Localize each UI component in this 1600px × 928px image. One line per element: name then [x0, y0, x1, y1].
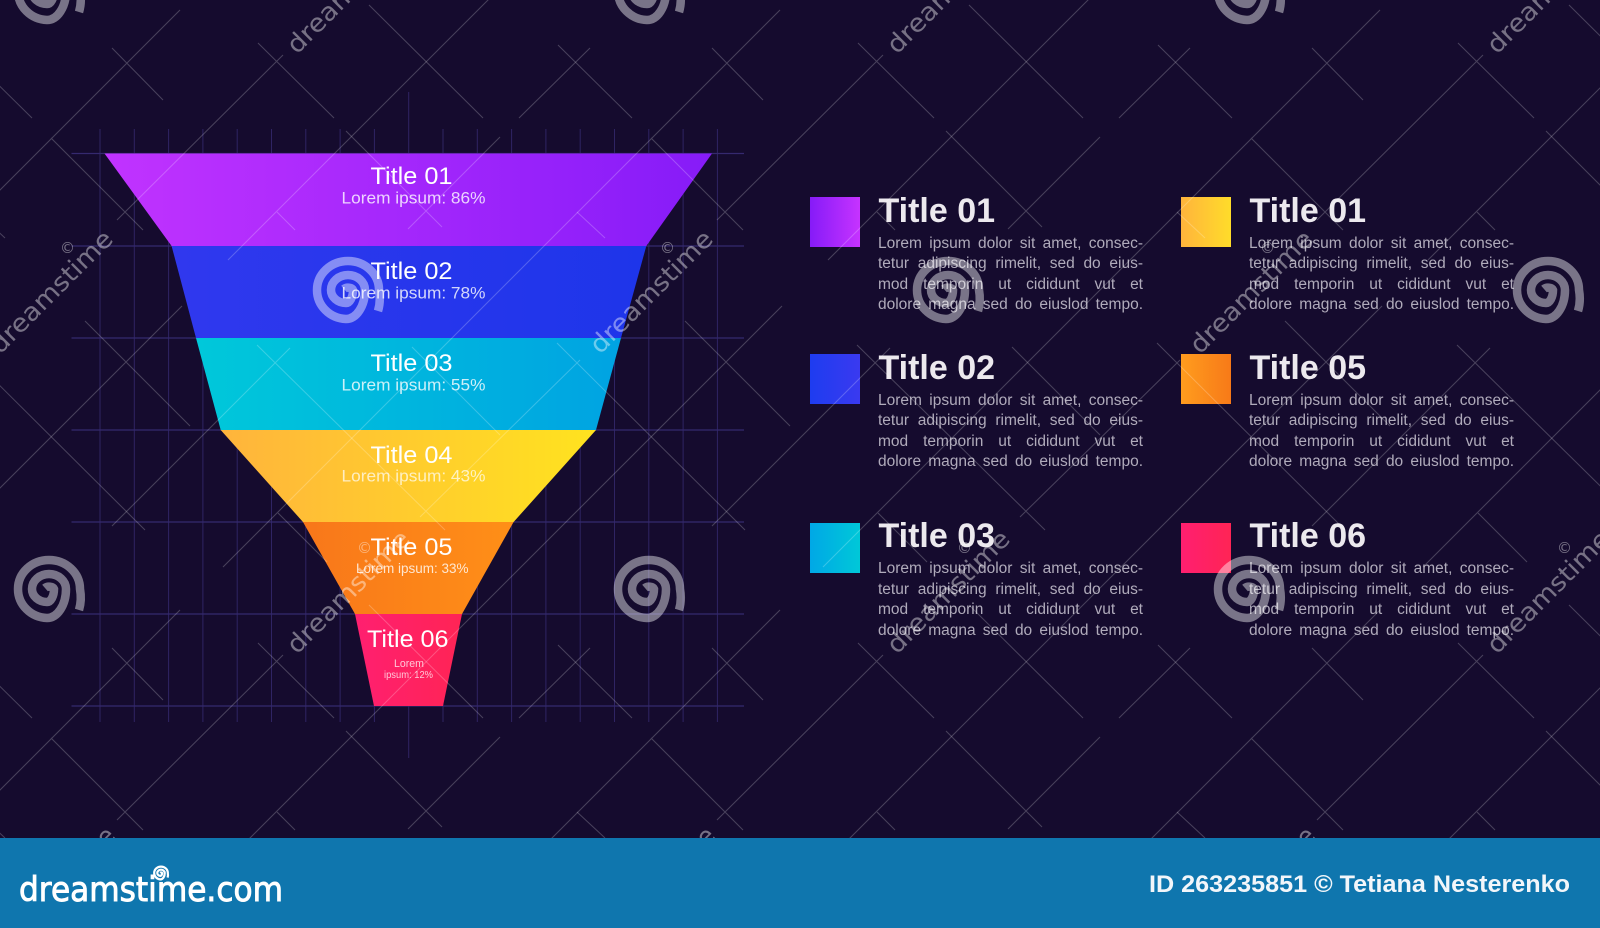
body text: mod temporin ut cididunt vut et — [1249, 433, 1514, 450]
funnel label 6 — [367, 626, 448, 681]
heading: Title 03 — [878, 517, 995, 555]
funnel band 4 — [221, 430, 596, 522]
body text: mod temporin ut cididunt vut et — [878, 433, 1143, 450]
watermark letter fragments above footer: e — [690, 821, 721, 852]
body text: tetur adipiscing rimelit, sed do eius- — [878, 255, 1143, 272]
body text: dolore magna sed do eiuslod tempo. — [1249, 453, 1514, 470]
body text: tetur adipiscing rimelit, sed do eius- — [1249, 412, 1514, 429]
funnel label 5: Lorem ipsum: 33% — [356, 561, 468, 576]
body text: Lorem ipsum dolor sit amet, consec- — [1249, 392, 1514, 409]
footer logo spiral — [154, 867, 168, 879]
watermark letter fragments above footer — [90, 821, 1321, 852]
body text — [1249, 235, 1514, 313]
swatch blue — [810, 354, 860, 404]
funnel label 3: Title 03 — [370, 350, 452, 377]
body text: Lorem ipsum dolor sit amet, consec- — [878, 392, 1143, 409]
legend item: Title 05 orange — [1181, 348, 1514, 470]
legend item: Title 06 pink — [1181, 517, 1514, 639]
body text: tetur adipiscing rimelit, sed do eius- — [878, 581, 1143, 598]
funnel band 2 — [172, 246, 646, 338]
body text: dolore magna sed do eiuslod tempo. — [1249, 296, 1514, 313]
funnel label 1: Lorem ipsum: 86% — [342, 188, 486, 208]
swatch orange — [1181, 354, 1231, 404]
swatch yellow — [1181, 197, 1231, 247]
body text: tetur adipiscing rimelit, sed do eius- — [1249, 255, 1514, 272]
funnel label 5: Title 05 — [370, 534, 452, 561]
funnel label 2 — [342, 258, 486, 302]
funnel label 2: Lorem ipsum: 78% — [342, 284, 486, 302]
body text: Lorem ipsum dolor sit amet, consec- — [878, 560, 1143, 577]
funnel label 1 — [342, 163, 486, 208]
funnel label 5 — [356, 534, 468, 576]
body text: dolore magna sed do eiuslod tempo. — [1249, 622, 1514, 639]
funnel chart — [104, 154, 712, 706]
body text: dolore magna sed do eiuslod tempo. — [878, 296, 1143, 313]
funnel label 4: Title 04 — [370, 442, 452, 469]
body text — [878, 235, 1143, 313]
swatch pink — [1181, 523, 1231, 573]
funnel label 6: Title 06 — [367, 626, 448, 653]
funnel band 6 — [355, 614, 462, 706]
watermark letter fragments above footer: e — [1290, 821, 1321, 852]
body text: dolore magna sed do eiuslod tempo. — [878, 622, 1143, 639]
funnel label 3: Lorem ipsum: 55% — [342, 376, 486, 394]
funnel label 4: Lorem ipsum: 43% — [342, 466, 486, 486]
heading: Title 05 — [1250, 348, 1366, 386]
body text: Lorem ipsum dolor sit amet, consec- — [878, 235, 1143, 252]
body text: tetur adipiscing rimelit, sed do eius- — [878, 412, 1143, 429]
footer logo text: dreamstime.com — [19, 870, 283, 910]
funnel label 4 — [342, 442, 486, 486]
body text — [878, 392, 1143, 470]
funnel label 6: Lorem — [394, 658, 424, 670]
body text: mod temporin ut cididunt vut et — [878, 601, 1143, 618]
body text: mod temporin ut cididunt vut et — [878, 276, 1143, 293]
body text — [878, 560, 1143, 639]
footer bar — [0, 838, 1600, 928]
body text: mod temporin ut cididunt vut et — [1249, 601, 1514, 618]
body text: Lorem ipsum dolor sit amet, consec- — [1249, 235, 1514, 252]
heading: Title 06 — [1250, 517, 1366, 555]
funnel band 5 — [303, 522, 514, 614]
funnel label 3 — [342, 350, 486, 394]
funnel band 3 — [196, 338, 621, 430]
legend item: Title 02 blue — [810, 348, 1143, 470]
body text: mod temporin ut cididunt vut et — [1249, 276, 1514, 293]
legend item: Title 01 purple — [810, 192, 1143, 313]
watermark spirals — [18, 0, 1580, 618]
footer credit: ID 263235851 © Tetiana Nesterenko — [1149, 871, 1570, 898]
body text: Lorem ipsum dolor sit amet, consec- — [1249, 560, 1514, 577]
watermark text — [0, 0, 1600, 659]
body text: dolore magna sed do eiuslod tempo. — [878, 453, 1143, 470]
heading: Title 02 — [878, 348, 995, 386]
grid behind funnel — [72, 92, 744, 758]
body text: tetur adipiscing rimelit, sed do eius- — [1249, 581, 1514, 598]
body text — [1249, 392, 1514, 470]
funnel band 1 — [104, 154, 712, 246]
legend item: Title 03 cyan — [810, 517, 1143, 639]
swatch cyan — [810, 523, 860, 573]
heading: Title 01 — [1250, 192, 1366, 230]
funnel label 2: Title 02 — [370, 258, 452, 285]
funnel label 1: Title 01 — [370, 163, 452, 190]
heading: Title 01 — [878, 192, 995, 230]
watermark letter fragments above footer: e — [90, 821, 121, 852]
funnel label 6: ipsum: 12% — [384, 670, 433, 681]
legend item: Title 01 yellow — [1181, 192, 1514, 313]
swatch purple — [810, 197, 860, 247]
body text — [1249, 560, 1514, 639]
